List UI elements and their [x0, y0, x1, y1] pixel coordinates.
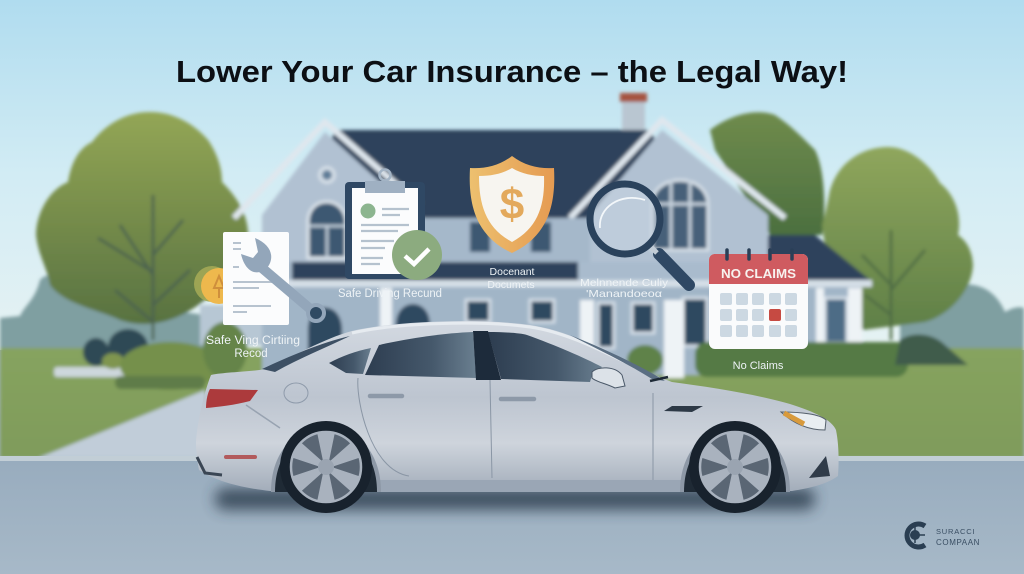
icon: wrench and document with coin: [194, 232, 324, 325]
distant hills: [0, 275, 1024, 350]
label: management: 'Manandoeoα: [586, 288, 662, 300]
lawn: [0, 348, 1024, 458]
car ground shadow: [215, 488, 815, 510]
label: document discount: Docenant: [490, 266, 535, 278]
label: safe driving record (left): Safe Ving Cirtiing: [206, 335, 300, 347]
fuel door: [284, 383, 308, 403]
icon: clipboard with check: [345, 170, 442, 280]
left round window: [320, 168, 334, 182]
icon: no claims calendar: [709, 250, 808, 349]
label: documents: Documets: [487, 279, 535, 291]
label: maintenance quality: Melnnende Culiy: [580, 277, 669, 289]
rear marker: [224, 455, 257, 459]
door handles: [370, 396, 534, 399]
front wheel: [680, 421, 790, 513]
icon: shield with dollar: [470, 156, 554, 253]
logo text line 2: COMPAAN: [936, 538, 980, 547]
icon: magnifying glass: [590, 184, 689, 285]
icon: shield with dollar: $: [500, 180, 524, 229]
wiper: [650, 377, 668, 381]
left pale porch: [200, 305, 262, 345]
right tree rear: [710, 112, 824, 235]
wrench: [241, 238, 324, 321]
mirror: [592, 368, 625, 388]
rear fender crease: [246, 405, 280, 428]
main roof: [300, 130, 700, 225]
blurred background scene: hills, trees, house, lawn: [0, 93, 1024, 458]
front door window: [488, 332, 602, 382]
quarter window: [329, 348, 371, 374]
left arched window: [308, 202, 346, 258]
chimney: [622, 98, 645, 148]
door arches: [308, 308, 342, 360]
rocker sill: [376, 480, 682, 492]
windshield: [570, 335, 665, 381]
icon: no claims calendar: NO CLAIMS: [721, 266, 796, 281]
document: [223, 232, 289, 325]
tail light: [206, 389, 258, 408]
roof highlight: [352, 323, 625, 362]
lower wall: [262, 287, 862, 375]
logo text line 1: SURACCI: [936, 527, 975, 536]
porch roof: [292, 262, 578, 280]
lower windows: [466, 298, 847, 348]
door seams: [358, 378, 653, 480]
logo mark: [907, 524, 925, 547]
left tree: [36, 112, 248, 340]
car body: [196, 321, 839, 491]
label: safe driving record: Safe Driving Recund: [338, 288, 442, 300]
right tree front: [822, 147, 973, 340]
rear wheel: [271, 421, 381, 513]
porch columns: [380, 288, 862, 378]
exhaust: [197, 457, 222, 475]
road: [0, 460, 1024, 574]
sky background: [0, 0, 1024, 350]
hedges: [83, 322, 968, 390]
curb: [0, 456, 1024, 461]
center band and windows: [400, 218, 590, 262]
left gable wall: [262, 132, 405, 262]
driveway: [38, 390, 215, 458]
label: second line: Recod: [234, 348, 268, 360]
door pillar: [473, 331, 501, 380]
walls: [262, 218, 768, 375]
garden path: [54, 367, 126, 377]
coin: [194, 266, 230, 302]
side vent: [664, 406, 703, 412]
label: no claims: No Claims: [733, 360, 784, 372]
right arched window: [652, 180, 708, 250]
house: [200, 93, 872, 378]
rear door window: [365, 332, 476, 378]
headlight: [781, 412, 826, 430]
logo: [907, 524, 980, 547]
gable trim: [234, 122, 420, 218]
right gable wall: [590, 130, 768, 262]
title: Lower Your Car Insurance – the Legal Way!: [176, 54, 848, 89]
car: [196, 321, 839, 513]
rear glass: [262, 336, 350, 372]
front grille: [809, 456, 830, 478]
